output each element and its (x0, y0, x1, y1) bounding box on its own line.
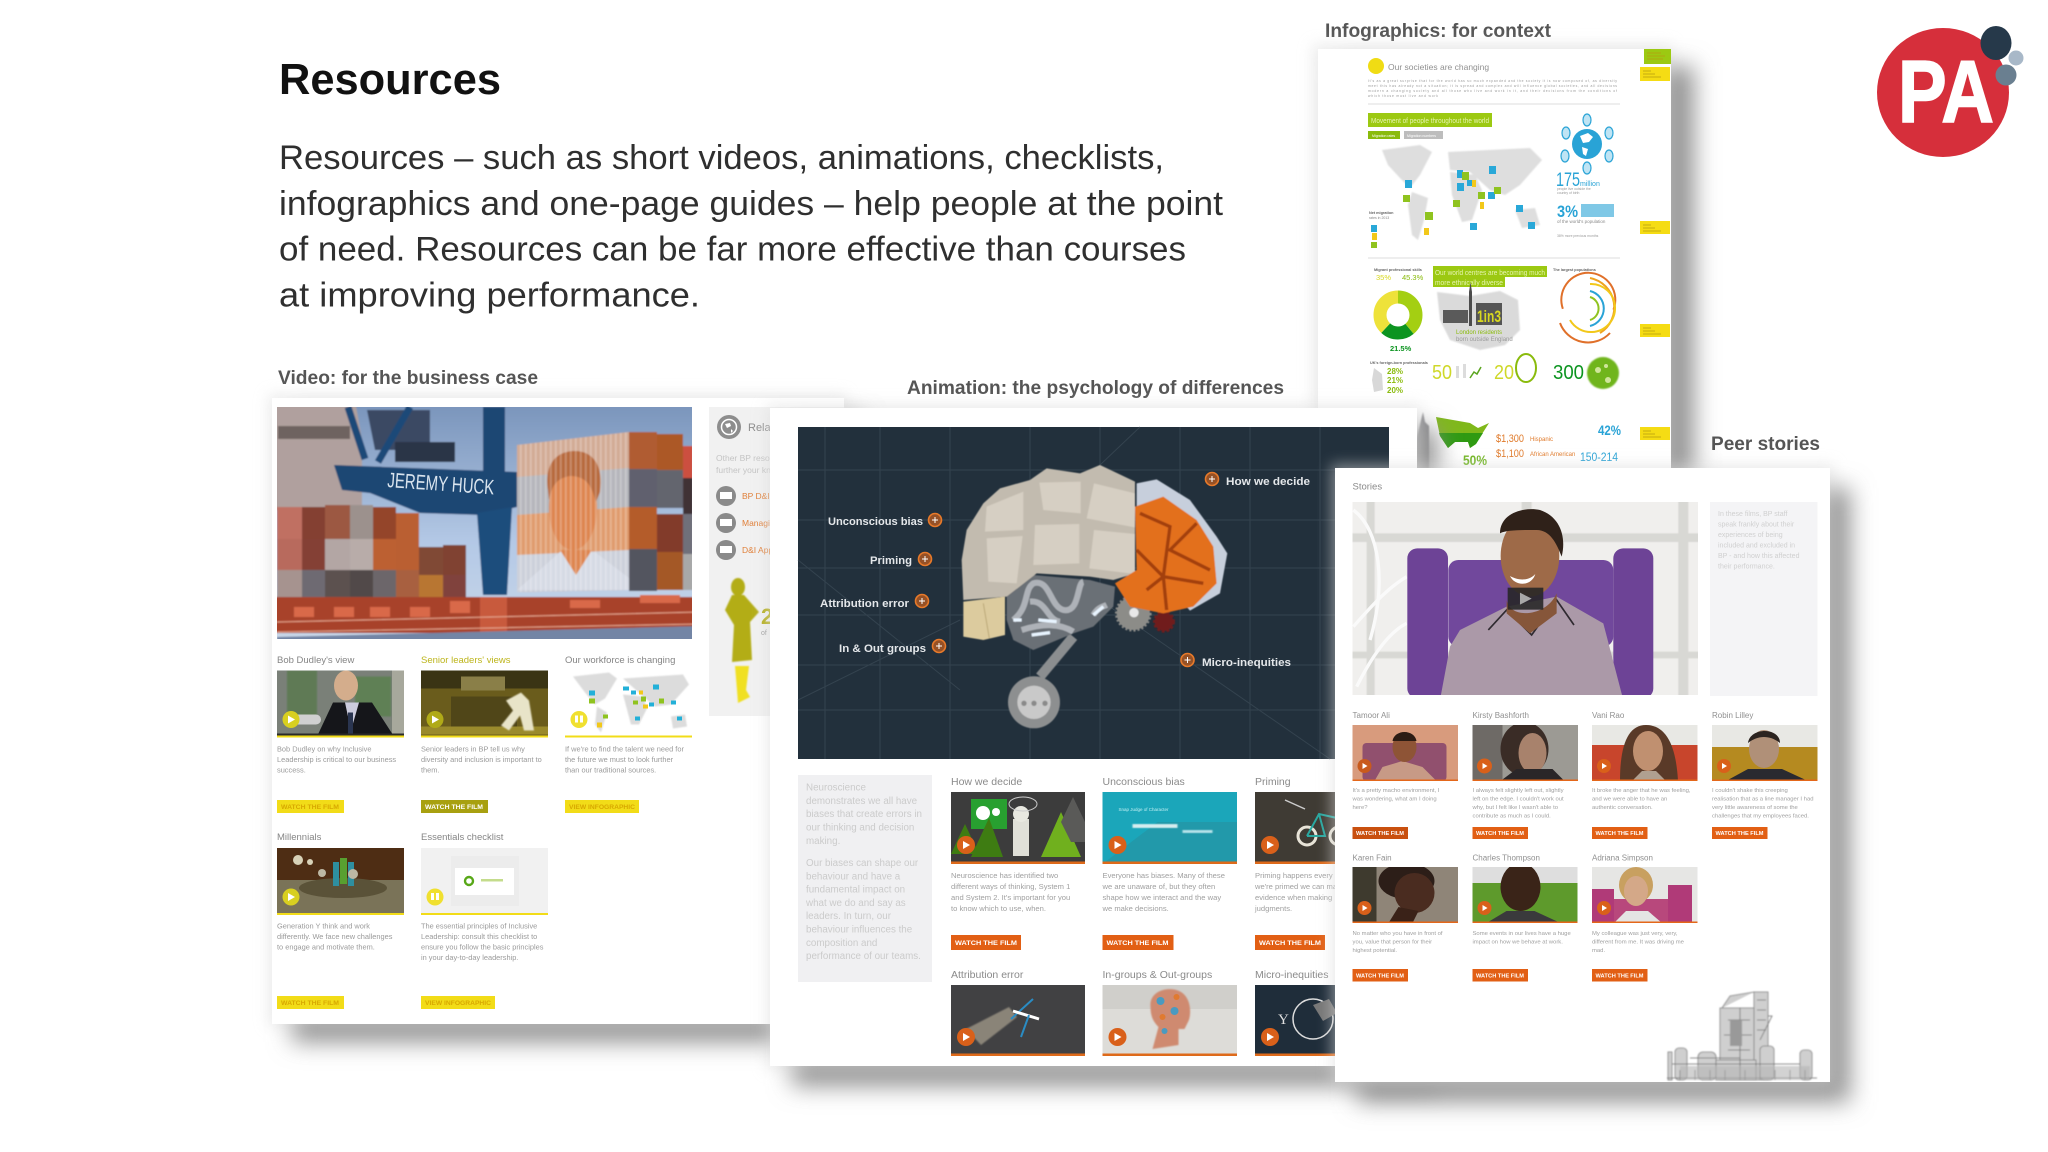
stat: 3 percent: 3% (1557, 202, 1578, 221)
stat: 20 (1494, 354, 1536, 384)
film card: priming: Priming happens every day and (1255, 871, 1362, 880)
sidebar: related resources: D&I Approach (742, 545, 795, 555)
brain label: in and out groups (839, 640, 946, 655)
donut chart: migrant skills: 21.5% (1390, 344, 1412, 353)
legend: net migration: Net migration (1369, 211, 1394, 215)
story card: Charles Thompson: impact on how we behave at work. (1472, 940, 1563, 946)
banner: movement of people (1368, 113, 1492, 127)
sidebar: related resources: Managing (742, 518, 780, 528)
film card: how we decide: to know which to use, when. (951, 904, 1046, 913)
infographic card: checklist: ensure you follow the basic principles (421, 942, 544, 952)
brain label: in and out groups: In & Out groups (839, 643, 926, 655)
story card: Adriana Simpson (1592, 854, 1698, 982)
story card: Charles Thompson (1472, 854, 1578, 982)
USA map and income stats: 150-214 (1580, 450, 1618, 464)
story card: Kirsty Bashforth: WATCH THE FILM (1476, 831, 1525, 837)
stat: 2 (761, 604, 773, 629)
sidebar: neuroscience text: making. (806, 836, 840, 847)
story card: Karen Fain: Karen Fain (1352, 854, 1392, 862)
story card: Tamoor Ali: WATCH THE FILM (1356, 831, 1405, 837)
film card: unconscious bias: Snap Judge of Character (1118, 807, 1169, 812)
stat: 50 (1432, 362, 1481, 384)
video card: senior leaders: diversity and inclusion is important to (421, 755, 542, 764)
stats row: 28 21 20 percent: UK's foreign-born professionals (1370, 361, 1428, 365)
sidebar: stories text: experiences of being (1718, 532, 1783, 539)
sidebar: related resources: BP D&I site (742, 491, 786, 501)
intro text block: Resources – such as short videos, animations, checklists, (279, 139, 1164, 177)
London map with 1 in 3 stat: 1in3 (1477, 307, 1501, 326)
video card: senior leaders: Senior leaders' views (421, 655, 511, 666)
banner: movement of people: Movement of people throughout the world (1371, 116, 1489, 125)
icon: globe (717, 415, 741, 439)
brain label: micro-inequities: Micro-inequities (1202, 657, 1291, 669)
infographic card: checklist: The essential principles of Inclusive (421, 922, 537, 930)
brain label: how we decide (1206, 472, 1310, 488)
brain label: priming (870, 552, 932, 567)
legend: net migration: rates in 2013 (1369, 216, 1389, 220)
deck (270, 597, 700, 633)
infographic card: checklist: VIEW INFOGRAPHIC (425, 1000, 492, 1007)
map filter buttons: Migration rates (1372, 134, 1395, 138)
sidebar: neuroscience text: leaders. In turn, our (806, 911, 892, 922)
panel: infographic page (1318, 49, 1671, 468)
USA map and income stats (1417, 412, 1621, 468)
icon: brain (962, 465, 1227, 728)
story card: Robin Lilley (1712, 711, 1818, 839)
sidebar: stories text: their performance. (1718, 564, 1775, 570)
icon: refinery illustration (1667, 992, 1817, 1080)
story card: Robin Lilley: very little awareness of some the (1712, 805, 1799, 811)
map filter buttons (1368, 131, 1443, 139)
infographic card: checklist (421, 832, 548, 1009)
story card: Adriana Simpson: Adriana Simpson (1592, 854, 1653, 862)
sidebar: stories text: In these films, BP staff (1718, 511, 1787, 518)
stat: 3 percent: of the world's population (1557, 219, 1606, 224)
icon: woman silhouette (725, 578, 759, 703)
arc chart: largest populations (1553, 268, 1620, 342)
sidebar: neuroscience text: composition and (806, 938, 877, 949)
infographic card: workforce: Our workforce is changing (565, 655, 675, 666)
film card: priming: judgments. (1254, 904, 1292, 913)
icon: globe with people (1561, 114, 1613, 174)
film card: how we decide (951, 776, 1085, 950)
video card: Bob Dudley: WATCH THE FILM (281, 804, 339, 811)
sidebar: neuroscience text: biases that create errors in (806, 809, 922, 820)
sidebar: related resources: further your knowledge (716, 465, 803, 475)
story card: Vani Rao: and we were able to have an (1592, 796, 1667, 802)
story card: Vani Rao: Vani Rao (1592, 711, 1625, 720)
sidebar: related resources: Other BP resources that can (716, 453, 823, 463)
video card: millennials (277, 832, 404, 1009)
film card: priming: Priming (1255, 776, 1291, 788)
main video still (1352, 502, 1698, 695)
sidebar: stories text: speak frankly about their (1718, 522, 1795, 528)
story card: Tamoor Ali: was wondering, what am I doing (1352, 796, 1437, 802)
stats row: 28 21 20 percent: 28% (1387, 367, 1403, 376)
billboard with portrait (517, 432, 629, 592)
film card: micro-inequities: Y (1278, 1012, 1289, 1028)
infographic card: workforce: the future we must to look further (565, 755, 674, 764)
infographic intro lines: which those must live and work (1368, 94, 1438, 98)
sidebar: neuroscience text (798, 775, 932, 982)
video card: millennials: WATCH THE FILM (281, 1000, 339, 1007)
icon: number badge (1368, 58, 1384, 74)
containers left (277, 505, 466, 600)
sidebar: neuroscience text: Neuroscience (806, 782, 866, 794)
infographic card: workforce: If we're to find the talent we need for (565, 744, 684, 754)
story card: Tamoor Ali (1352, 711, 1458, 839)
film card: unconscious bias: shape how we interact and the way (1102, 893, 1221, 902)
panel: animation page (770, 408, 1417, 1066)
film card: micro-inequities: Micro-inequities (1255, 969, 1329, 981)
donut chart: migrant skills: Migrant professional skills (1374, 268, 1422, 272)
icon: section tabs (1640, 49, 1671, 440)
film card: unconscious bias (1102, 776, 1238, 950)
film card: how we decide: different ways of thinking, System 1 (951, 882, 1070, 891)
stat: 300 (1553, 357, 1619, 389)
infographic card: checklist: Essentials checklist (421, 832, 504, 843)
story card: Vani Rao (1592, 711, 1698, 839)
story card: Vani Rao: WATCH THE FILM (1596, 831, 1644, 837)
sidebar: related resources: of (761, 630, 767, 637)
story card: Tamoor Ali: It's a pretty macho environment, I (1352, 788, 1440, 794)
sidebar: neuroscience text: behaviour influences the (806, 924, 913, 936)
intro text block: at improving performance. (279, 276, 700, 314)
film card: priming (1254, 776, 1389, 950)
film card: how we decide: How we decide (951, 776, 1022, 788)
stat: 3 percent: 38% more previous months (1557, 234, 1599, 238)
brain label: attribution error (820, 594, 928, 610)
film card: priming: we're primed we can make (1254, 882, 1345, 891)
story card: Robin Lilley: Robin Lilley (1712, 711, 1753, 720)
video card: senior leaders (421, 655, 548, 813)
hero video still (277, 407, 692, 639)
video card: Bob Dudley: Leadership is critical to our business (277, 755, 396, 764)
heading: infographics: Infographics: for context (1325, 21, 1552, 42)
heading: peer stories: Peer stories (1711, 434, 1820, 455)
USA map and income stats: 50% (1463, 452, 1487, 468)
video card: millennials: to engage and motivate them. (277, 942, 375, 952)
infographic card: checklist: Leadership: consult this checklist to (421, 932, 537, 941)
sidebar: stories text: BP - and how this affected (1718, 553, 1800, 560)
story card: Robin Lilley: challenges that my employees faced. (1712, 814, 1809, 820)
map filter buttons: Migration numbers (1407, 134, 1436, 138)
story card: Kirsty Bashforth: left on the edge. I couldn't work out (1472, 796, 1564, 802)
heading: animation: Animation: the psychology of differences (907, 378, 1284, 399)
sidebar: related resources (709, 407, 844, 716)
stats row: 28 21 20 percent: 20% (1387, 386, 1403, 395)
sidebar: neuroscience text: our thinking and decision (806, 822, 914, 834)
stat: 3 percent (1557, 202, 1614, 238)
USA map and income stats: $1,300 (1496, 433, 1524, 445)
video card: Bob Dudley: Bob Dudley's view (277, 655, 354, 666)
infographic card: workforce: than our traditional sources. (565, 766, 656, 774)
stats row: 28 21 20 percent: 21% (1387, 376, 1403, 385)
world map (1382, 145, 1542, 240)
infographic intro lines: It's as a great surprise that for the world has so much expanded and the society it is now composed of, as diversity (1368, 79, 1617, 83)
story card: Vani Rao: It broke the anger that he was feeling, (1592, 788, 1691, 794)
story card: Adriana Simpson: mad. (1592, 948, 1605, 954)
film card: priming: WATCH THE FILM (1259, 940, 1322, 947)
video card: millennials: Millennials (277, 832, 322, 843)
brain label: attribution error: Attribution error (820, 598, 910, 610)
infographic card: checklist: in your day-to-day leadership. (421, 953, 518, 962)
brain label: unconscious bias: Unconscious bias (828, 516, 923, 528)
sidebar: neuroscience text: demonstrates we all have (806, 796, 918, 807)
video card: Bob Dudley: success. (277, 766, 306, 774)
video card: millennials: Generation Y think and work (277, 922, 370, 930)
film card: how we decide: Neuroscience has identified two (951, 871, 1058, 880)
story card: Robin Lilley: I couldn't shake this creeping (1712, 788, 1788, 794)
story card: Adriana Simpson: different from me. It was driving me (1592, 940, 1685, 946)
video card: Bob Dudley (277, 655, 404, 813)
panel: video page (270, 398, 844, 1024)
logo: PA (1877, 26, 2024, 157)
intro text block: of need. Resources can be far more effective than courses (279, 230, 1186, 268)
donut chart: migrant skills (1374, 268, 1424, 353)
story card: Karen Fain: you, value that person for their (1352, 940, 1432, 946)
intro text block: infographics and one-page guides – help people at the point (279, 185, 1224, 223)
brain label: priming: Priming (870, 555, 912, 567)
arc chart: largest populations: The largest populations (1553, 268, 1596, 272)
hero: brain illustration (798, 427, 1389, 759)
stat: 175 million: 175 (1556, 170, 1580, 191)
story card: Adriana Simpson: My colleague was just very, very, (1592, 931, 1678, 937)
USA map and income stats: Hispanic (1530, 437, 1553, 443)
video card: senior leaders: them. (421, 766, 439, 774)
story card: Karen Fain: No matter who you have in front of (1352, 931, 1443, 937)
title: Resources (279, 55, 501, 104)
infographic intro lines (1368, 79, 1617, 98)
brain label: unconscious bias (828, 514, 942, 528)
sidebar: neuroscience text: what we do and say as (805, 898, 906, 909)
banner: world centres: more ethnically diverse (1435, 280, 1503, 287)
sidebar: neuroscience text: Our biases can shape our (806, 858, 919, 869)
donut chart: migrant skills: 35% (1376, 273, 1391, 282)
stat: 175 million: country of birth (1557, 191, 1580, 195)
sidebar: neuroscience text: behaviour and have a (806, 871, 901, 882)
video card: senior leaders: WATCH THE FILM (425, 804, 483, 811)
infographic heading: Our societies are changing (1388, 62, 1489, 72)
containers right (629, 432, 693, 591)
film card: in-groups and out-groups: In-groups & Out-groups (1102, 969, 1212, 981)
story card: Karen Fain (1352, 854, 1458, 982)
intro text block (279, 139, 1224, 314)
infographic card: workforce (565, 655, 692, 813)
story card: Charles Thompson: WATCH THE FILM (1476, 974, 1525, 980)
film card: unconscious bias: we are unaware of, but they often (1102, 882, 1215, 891)
London map with 1 in 3 stat: born outside England (1456, 337, 1513, 343)
page heading: Stories (1352, 482, 1382, 492)
story card: Adriana Simpson: WATCH THE FILM (1596, 974, 1644, 980)
film card: priming: evidence when making (1255, 893, 1332, 902)
panel: peer stories page (1335, 468, 1830, 1082)
sidebar: stories text (1710, 502, 1818, 696)
London map with 1 in 3 stat (1437, 282, 1520, 350)
story card: Charles Thompson: Charles Thompson (1472, 854, 1540, 862)
stats row: 28 21 20 percent (1370, 361, 1428, 395)
story card: Kirsty Bashforth (1472, 711, 1578, 839)
story card: Charles Thompson: Some events in our lives have a huge (1472, 931, 1571, 937)
story card: Kirsty Bashforth: contribute as much as I could. (1472, 814, 1551, 820)
story card: Karen Fain: WATCH THE FILM (1356, 974, 1405, 980)
story card: Tamoor Ali: Tamoor Ali (1352, 711, 1390, 720)
film card: in-groups and out-groups (1102, 969, 1238, 1056)
film card: unconscious bias: we make decisions. (1102, 904, 1169, 913)
stat: 175 million: people live outside the (1557, 187, 1591, 191)
video card: millennials: differently. We face new challenges (277, 932, 393, 941)
infographic intro lines: modern a changing society and all those who live and work in it, and their decisions from the conditions of (1368, 89, 1617, 93)
sidebar: neuroscience text: performance of our teams. (806, 951, 921, 962)
story card: Robin Lilley: realisation that as a line manager I had (1712, 796, 1814, 802)
stat: 50: 50 (1432, 362, 1452, 384)
legend: net migration (1369, 211, 1394, 248)
story card: Kirsty Bashforth: I always felt slightly left out, slightly (1472, 788, 1564, 794)
USA map and income stats: $1,100 (1496, 448, 1524, 460)
story card: Kirsty Bashforth: Kirsty Bashforth (1472, 711, 1529, 720)
story card: Kirsty Bashforth: why, but I felt like I wasn't able to (1472, 805, 1559, 811)
USA map and income stats: 42% (1598, 422, 1621, 438)
film card: unconscious bias: Everyone has biases. Many of these (1102, 871, 1225, 880)
film card: micro-inequities (1255, 969, 1389, 1056)
banner: world centres (1433, 266, 1547, 287)
film card: unconscious bias: Unconscious bias (1102, 776, 1185, 788)
stat: 300: 300 (1553, 362, 1584, 384)
sidebar: related resources: Related resources (748, 422, 838, 434)
story card: Robin Lilley: WATCH THE FILM (1716, 831, 1764, 837)
film card: how we decide: and System 2. It's important for you (951, 893, 1070, 902)
logo: PA: PA (1898, 42, 1994, 141)
film card: unconscious bias: WATCH THE FILM (1106, 940, 1169, 947)
video card: Bob Dudley: Bob Dudley on why Inclusive (277, 744, 372, 754)
stat: 20: 20 (1494, 362, 1514, 384)
infographic intro lines: meet this has already not a situation; it is spread and complex and will influence global societies, and all decisions (1368, 84, 1617, 88)
sidebar: stories text: included and excluded in (1718, 542, 1795, 550)
brain label: micro-inequities (1181, 654, 1291, 669)
London map with 1 in 3 stat: London residents (1456, 330, 1502, 336)
story card: Tamoor Ali: here? (1352, 805, 1368, 811)
brain label: how we decide: How we decide (1226, 476, 1310, 488)
film card: attribution error: Attribution error (951, 969, 1024, 981)
film card: how we decide: WATCH THE FILM (955, 940, 1018, 947)
infographic card: workforce: VIEW INFOGRAPHIC (569, 804, 636, 811)
banner: world centres: Our world centres are becoming much (1435, 270, 1545, 277)
donut chart: migrant skills: 45.3% (1402, 273, 1424, 282)
video card: senior leaders: Senior leaders in BP tell us why (421, 744, 525, 754)
stat: 175 million: million (1580, 181, 1600, 188)
hero caption: JEREMY HUCK (387, 469, 495, 499)
sidebar: neuroscience text: fundamental impact on (806, 885, 905, 896)
film card: attribution error (951, 969, 1085, 1056)
USA map and income stats: African American (1530, 452, 1575, 458)
heading: video: Video: for the business case (278, 368, 538, 389)
story card: Karen Fain: highest potential. (1352, 948, 1397, 954)
story card: Vani Rao: authentic conversation. (1592, 805, 1653, 811)
stat: 175 million (1556, 170, 1600, 195)
